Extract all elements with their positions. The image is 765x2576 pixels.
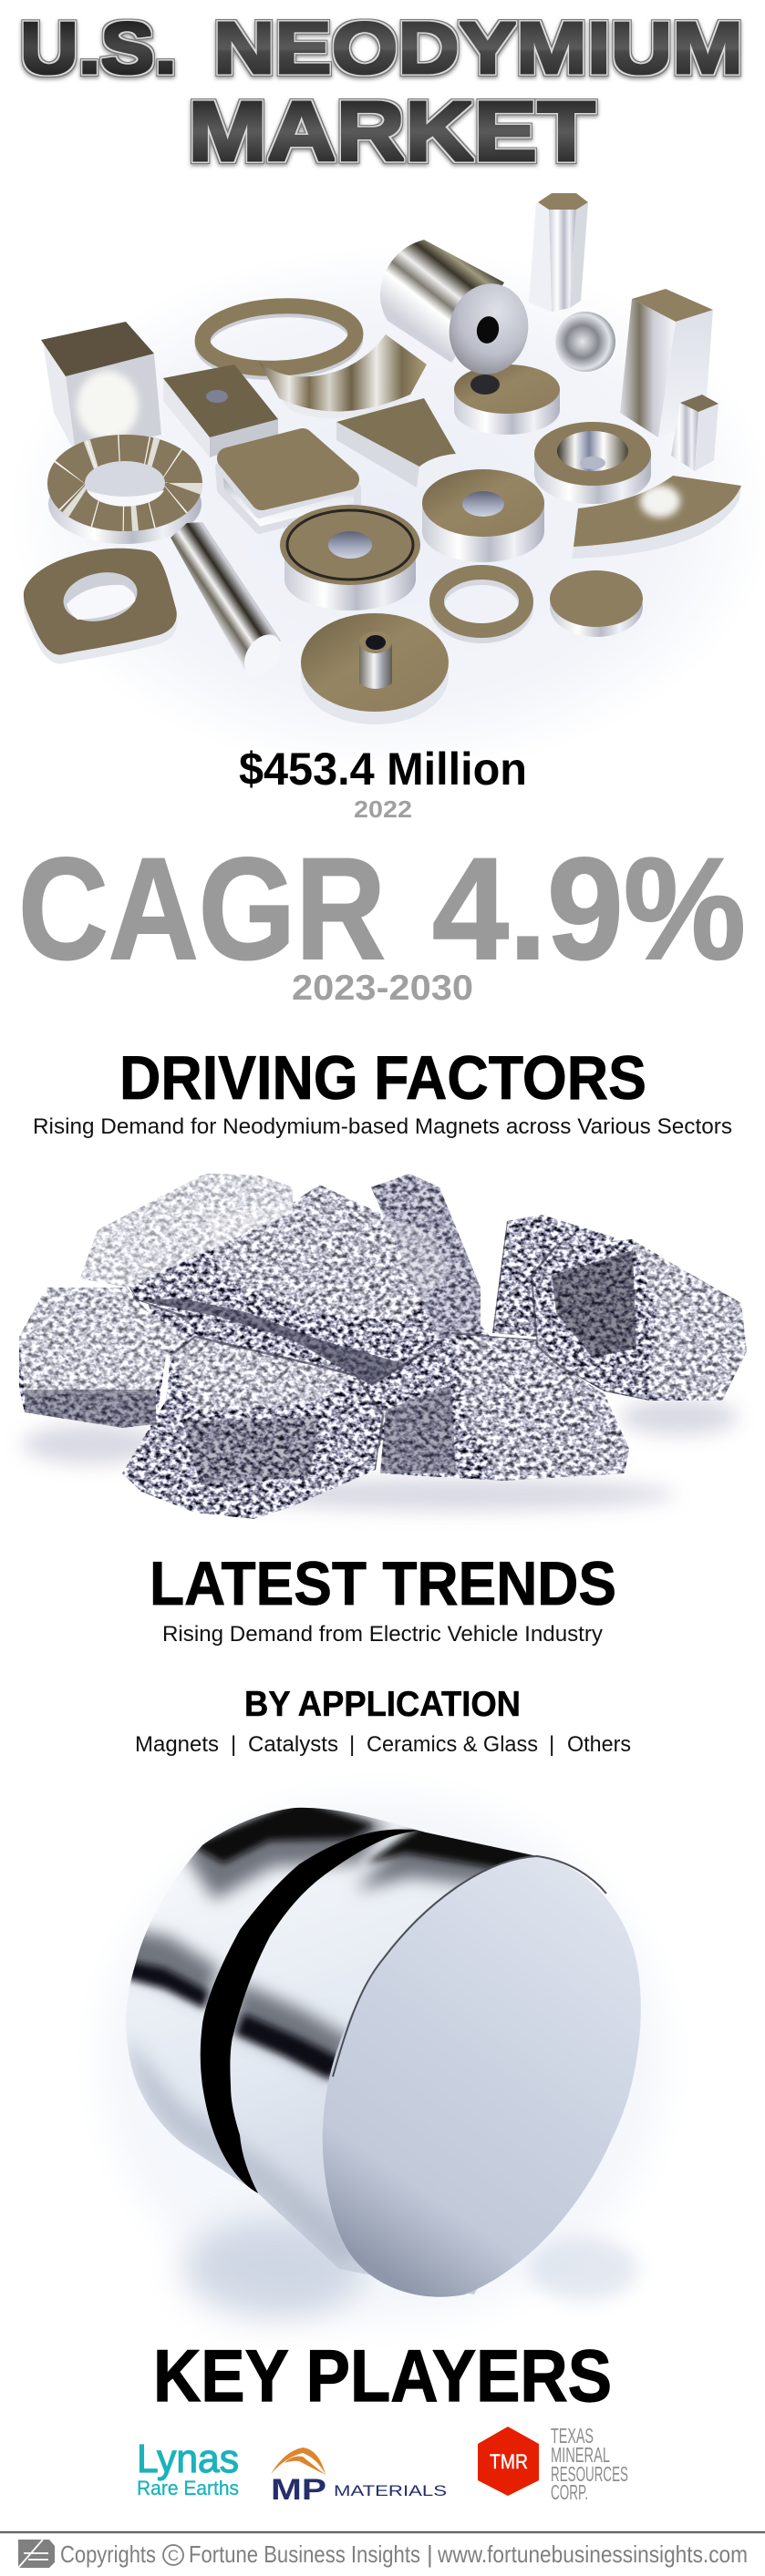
disc magnet illustration — [100, 1795, 666, 2324]
logo: Lynas Rare Earths: Lynas — [137, 2437, 239, 2481]
logo: Texas Mineral Resources Corp — [478, 2424, 628, 2504]
copyright text: | — [427, 2540, 433, 2568]
logo: Texas Mineral Resources Corp: CORP. — [551, 2480, 588, 2504]
copyright text: Copyrights — [60, 2540, 156, 2568]
logo: Texas Mineral Resources Corp: MINERAL — [551, 2443, 610, 2467]
small block right — [671, 395, 718, 471]
footer rule — [0, 2531, 765, 2533]
wedge block — [336, 398, 456, 487]
title — [20, 7, 743, 179]
block with small hole — [163, 364, 278, 457]
logo: Texas Mineral Resources Corp: TEXAS — [551, 2424, 594, 2448]
ring magnet with groove — [280, 505, 420, 611]
footer — [18, 2540, 748, 2568]
thin ring — [437, 572, 526, 636]
application segments — [135, 1732, 631, 1757]
glow and shadow — [100, 1795, 666, 2324]
application segments: | — [231, 1732, 236, 1757]
driving factors heading: DRIVING FACTORS — [119, 1043, 646, 1113]
CAGR figure — [18, 827, 746, 990]
logo: MP Materials: MATERIALS — [334, 2482, 447, 2499]
orange swoosh — [271, 2448, 326, 2475]
application segments: Catalysts — [248, 1732, 338, 1757]
rounded plate with hole — [24, 549, 177, 664]
sphere — [555, 312, 615, 372]
end face rim highlight — [333, 1856, 606, 2077]
latest trends heading: LATEST TRENDS — [150, 1549, 616, 1618]
logo: Texas Mineral Resources Corp: TMR — [490, 2450, 528, 2473]
magnets illustration — [9, 193, 765, 775]
rock texture — [14, 1166, 752, 1526]
copyright text — [60, 2540, 748, 2568]
logo: Lynas Rare Earths: Rare Earths — [137, 2477, 239, 2499]
holed disc middle — [422, 469, 544, 562]
red hexagon — [478, 2427, 539, 2496]
middle metallic shading — [119, 1927, 219, 2005]
application segments: Magnets — [135, 1732, 219, 1757]
forecast period: 2023-2030 — [292, 969, 473, 1008]
disc behind large cylinder — [454, 364, 560, 435]
title word: MARKET: MARKET — [188, 84, 595, 179]
countersunk ring — [534, 422, 651, 504]
CAGR figure: 4.9% — [432, 827, 746, 990]
disc with tube pin — [301, 613, 449, 724]
copyright text: C — [168, 2547, 179, 2564]
application segments: Ceramics & Glass — [367, 1732, 538, 1757]
logo: Lynas Rare Earths — [137, 2437, 239, 2499]
rounded square block — [219, 439, 357, 530]
by application heading: BY APPLICATION — [244, 1685, 521, 1724]
floor shading — [9, 246, 765, 775]
logo: Texas Mineral Resources Corp: RESOURCES — [551, 2462, 628, 2486]
magnet end face — [323, 1856, 641, 2297]
solid disc — [550, 570, 643, 637]
market size value: $453.4 Million — [239, 744, 527, 795]
rock shadow — [23, 1399, 739, 1511]
tall block right — [620, 289, 713, 437]
flat ring — [201, 303, 357, 375]
neodymium rocks photo — [14, 1166, 752, 1526]
title word: U.S.: U.S. — [20, 7, 177, 88]
application segments: | — [349, 1732, 355, 1757]
icon: Fortune Business Insights logo — [18, 2540, 55, 2568]
copyright text: Fortune Business Insights — [189, 2540, 420, 2568]
logo: MP Materials — [271, 2448, 447, 2506]
application segments: | — [549, 1732, 554, 1757]
cube left — [41, 322, 161, 454]
lower edge shading — [127, 2037, 365, 2269]
latest trends text: Rising Demand from Electric Vehicle Industry — [162, 1622, 603, 1647]
hexagonal rod — [529, 193, 588, 312]
CAGR figure: CAGR — [18, 827, 386, 990]
upper metallic shading — [182, 1795, 388, 1900]
segmented ring — [48, 453, 202, 544]
base year: 2022 — [354, 795, 412, 823]
application segments: Others — [567, 1732, 631, 1757]
magnet body — [126, 1808, 534, 2294]
rock edge lines — [129, 1221, 649, 1470]
driving factors text: Rising Demand for Neodymium-based Magnets across Various Sectors — [33, 1114, 732, 1139]
large cylinder with hole — [380, 240, 536, 382]
black band — [201, 1830, 419, 2193]
title word: NEODYMIUM: NEODYMIUM — [213, 7, 743, 88]
fan segment — [572, 476, 741, 559]
logo: MP Materials: MP — [271, 2473, 326, 2506]
key players heading: KEY PLAYERS — [153, 2335, 612, 2417]
curved tile — [259, 334, 427, 418]
rock lighting facets — [80, 1174, 293, 1288]
tube rod — [171, 522, 288, 682]
